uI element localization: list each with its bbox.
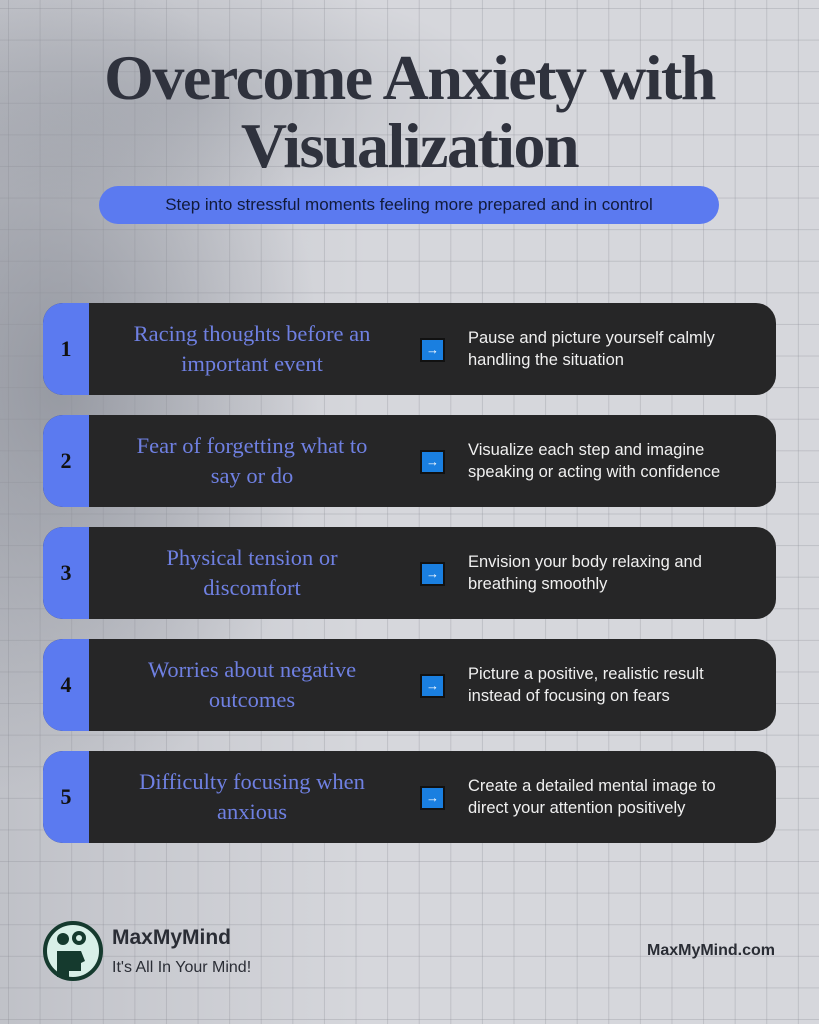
card 4: → [426,678,439,693]
card 5: anxious [217,799,287,824]
website: MaxMyMind.com [647,942,775,959]
title [104,42,716,181]
card 1: Racing thoughts before an [134,321,370,346]
card 4: outcomes [209,687,295,712]
title: Visualization [241,110,578,181]
card 2: say or do [211,463,293,488]
card 5: Create a detailed mental image to direct your attention positively [468,777,716,817]
icon: logo [43,921,103,981]
card 2: Visualize each step and imagine speaking or acting with confidence [468,441,720,481]
title: Overcome Anxiety with [104,42,715,113]
card 3 [43,527,776,619]
card 4: 4 [60,672,72,697]
card 3: → [426,566,439,581]
card 3: 3 [60,560,72,585]
card 1: 1 [60,336,72,361]
card 1: important event [181,351,323,376]
subtitle pill [99,186,719,224]
card 5: Difficulty focusing when [139,769,365,794]
card 1: → [426,342,439,357]
card 4: Worries about negative [148,657,356,682]
card 5: → [426,790,439,805]
tagline: It's All In Your Mind! [112,959,251,976]
card 2: 2 [60,448,72,473]
card 4 [43,639,776,731]
card 5: 5 [60,784,72,809]
card 3: Envision your body relaxing and breathing smoothly [468,553,702,593]
card 4: Picture a positive, realistic result instead of focusing on fears [468,665,704,705]
card 1: Pause and picture yourself calmly handling the situation [468,329,715,369]
card 3: Physical tension or [166,545,338,570]
card 1 [43,303,776,395]
subtitle pill: Step into stressful moments feeling more prepared and in control [165,195,653,214]
card 2 [43,415,776,507]
card 2: → [426,454,439,469]
card 3: discomfort [203,575,301,600]
card 5 [43,751,776,843]
brand name: MaxMyMind [112,926,231,949]
card 2: Fear of forgetting what to [137,433,367,458]
